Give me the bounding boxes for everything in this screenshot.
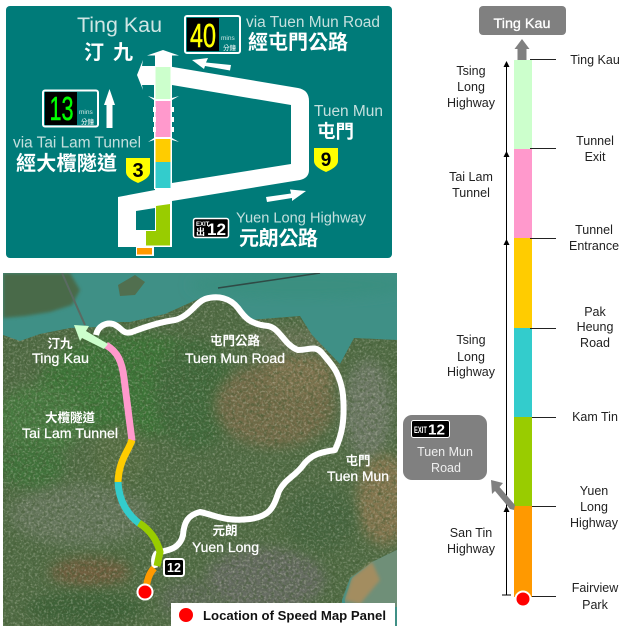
map label: Tai Lam Tunnel (22, 411, 118, 438)
right labels: stations: Kam Tin (572, 410, 618, 424)
station ticks (530, 60, 556, 596)
label: Tuen Mun (314, 103, 383, 142)
label: via Tai Lam Tunnel: via Tai Lam Tunnel (13, 134, 141, 152)
map label: Tai Lam Tunnel: Tai Lam Tunnel (22, 425, 118, 441)
left labels: road names: Highway (447, 96, 496, 110)
route: Tsing Long Highway coloured segments (106, 345, 160, 590)
arrow: up to Ting Kau (147, 50, 179, 70)
speed sign: 13 mins via Tai Lam Tunnel (43, 90, 98, 127)
shield: route 9: 9 (321, 150, 331, 171)
speed sign: 40 mins via Tuen Mun Road: mins (221, 35, 235, 42)
left labels: road names: Tai Lam (449, 170, 493, 184)
label: via Tuen Mun Road: via Tuen Mun Road (246, 14, 380, 31)
label: via Tai Lam Tunnel (13, 134, 141, 175)
shield: route 3 (126, 158, 150, 183)
right labels: stations: Road (580, 336, 610, 350)
map label: Ting Kau: 汀九 (47, 337, 73, 351)
right labels: stations: Entrance (569, 239, 619, 253)
legend: location of speed map panel (171, 603, 395, 626)
arrow: left to Tuen Mun Road (137, 60, 156, 90)
left labels: road names: Tsing (456, 64, 486, 78)
right labels: stations (569, 53, 620, 612)
right labels: stations: Ting Kau (570, 53, 620, 67)
right labels: stations: Exit (585, 150, 606, 164)
panel: linear route diagram (403, 6, 620, 612)
map label: Tuen Mun Road (185, 334, 284, 364)
map label: Yuen Long (192, 523, 259, 555)
map label: Ting Kau (32, 337, 89, 366)
speed sign: 13 mins via Tai Lam Tunnel: 13 (50, 90, 74, 127)
arrow: to Ting Kau box (514, 39, 530, 60)
map label: Yuen Long: 元朗 (212, 523, 238, 538)
badge: exit 12: 12 (207, 220, 226, 239)
map label: Tuen Mun (327, 454, 388, 482)
colour bar: speed segments (514, 60, 532, 597)
map label: Tuen Mun Road: 屯門公路 (210, 333, 260, 348)
map label: Tuen Mun Road: Tuen Mun Road (185, 350, 285, 366)
speed sign: 40 mins via Tuen Mun Road: 40 (190, 17, 216, 54)
exit box: Tuen Mun Road: Tuen Mun (417, 445, 473, 459)
badge: exit 12 on map (164, 559, 184, 576)
badge: exit 12 (194, 218, 228, 239)
left labels: road names (447, 64, 496, 556)
right labels: stations: Fairview (572, 581, 619, 595)
road network: white carriageway (118, 64, 309, 256)
map label: Tuen Mun: 屯門 (345, 453, 371, 468)
badge: exit 12: EXIT (196, 222, 210, 228)
left labels: road names: Long (457, 350, 485, 364)
destination box: Ting Kau (479, 6, 566, 35)
marker: speed map panel location (138, 584, 152, 600)
marker: panel location (516, 592, 530, 606)
heading: Ting Kau: 汀 九 (84, 41, 133, 64)
destination box: Ting Kau: Ting Kau (494, 16, 550, 31)
arrow: head to Ting Kau (74, 325, 108, 349)
label: Yuen Long Highway (236, 210, 366, 250)
label: Tuen Mun: Tuen Mun (314, 103, 383, 120)
direction line with arrowheads (502, 61, 511, 595)
label: via Tuen Mun Road (246, 14, 380, 54)
shield: route 3: 3 (132, 160, 144, 182)
panel: satellite map (0, 271, 413, 628)
map label: Yuen Long: Yuen Long (192, 539, 259, 555)
left labels: road names: San Tin (450, 526, 492, 540)
exit box: Tuen Mun Road (403, 415, 487, 480)
arrow: toward Tuen Mun along Yuen Long Highway (266, 190, 306, 202)
shield: route 9 (314, 148, 338, 172)
exit box: Tuen Mun Road: EXIT (414, 425, 427, 435)
left labels: road names: Tunnel (452, 186, 490, 200)
label: Yuen Long Highway: Yuen Long Highway (236, 210, 366, 226)
speed sign: 13 mins via Tai Lam Tunnel: 分鐘 (81, 117, 94, 126)
arrow: exit to Tuen Mun Road (491, 480, 515, 510)
map label: Tai Lam Tunnel: 大欖隧道 (45, 410, 95, 425)
right labels: stations: Long (580, 500, 608, 514)
left labels: road names: Tsing (456, 333, 486, 347)
left labels: road names: Highway (447, 542, 496, 556)
badge: exit 12: 出 (196, 226, 205, 237)
heading: Ting Kau (77, 13, 162, 64)
left labels: road names: Long (457, 80, 485, 94)
heading: Ting Kau: Ting Kau (77, 13, 162, 37)
exit box: Tuen Mun Road: Road (431, 461, 461, 475)
exit box: Tuen Mun Road: 12 (428, 422, 445, 438)
map background: water and land (0, 271, 413, 628)
map label: Ting Kau: Ting Kau (32, 350, 89, 366)
label: via Tuen Mun Road: 經屯門公路 (248, 31, 348, 54)
right labels: stations: Pak (584, 305, 607, 319)
right labels: stations: Park (582, 598, 609, 612)
right labels: stations: Tunnel (575, 223, 613, 237)
badge: exit 12 on map: 12 (167, 561, 181, 575)
right labels: stations: Yuen (580, 484, 608, 498)
speed sign: 40 mins via Tuen Mun Road: 分鐘 (223, 43, 236, 52)
speed sign: 40 mins via Tuen Mun Road (185, 16, 240, 54)
speed sign: 13 mins via Tai Lam Tunnel: mins (79, 109, 93, 116)
centre strip: coloured speed segments (137, 66, 172, 254)
arrow: up beside sign (104, 89, 115, 128)
tunnel markers (148, 96, 179, 142)
map label: Tuen Mun: Tuen Mun (327, 468, 389, 484)
label: via Tai Lam Tunnel: 經大欖隧道 (16, 152, 117, 175)
right labels: stations: Highway (570, 516, 619, 530)
route: Tuen Mun Road (white) (96, 297, 344, 568)
arrow: toward Ting Kau along Tuen Mun Road (192, 58, 231, 70)
panel: speed map sign (6, 6, 392, 258)
label: Tuen Mun: 屯門 (317, 121, 354, 142)
legend: location of speed map panel: Location of Speed Map Panel (203, 608, 386, 623)
right labels: stations: Heung (577, 320, 613, 334)
right labels: stations: Tunnel (576, 134, 614, 148)
left labels: road names: Highway (447, 365, 496, 379)
label: Yuen Long Highway: 元朗公路 (239, 227, 318, 250)
